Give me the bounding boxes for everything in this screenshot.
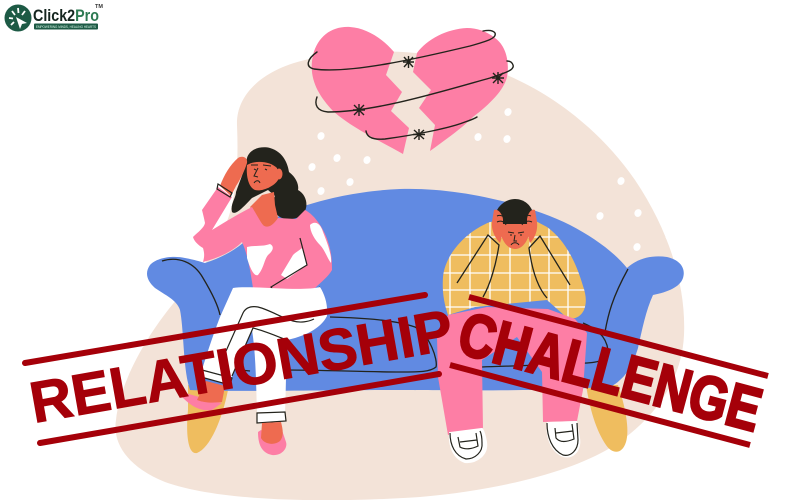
forearm and hand [220,157,247,196]
facial features [251,165,271,183]
trouser folds [222,307,314,376]
stamp bottom rule [450,365,750,445]
ear [276,168,282,180]
face [247,162,279,190]
neck and chest [250,192,278,227]
icon: broken heart [308,27,513,154]
right shoe lines [547,423,578,455]
logo tagline bar [34,24,98,30]
left hand [492,210,503,243]
sweater lines [217,184,320,308]
logo emblem [4,4,32,32]
hands on head [492,210,537,243]
man face features [508,232,524,245]
sofa [147,189,684,453]
woman [178,147,332,455]
left shoe lines [450,431,482,459]
right hand [527,210,537,243]
finger lines [497,215,532,225]
logo cursor [16,17,27,29]
sofa contour lines [162,259,628,372]
stamp top rule [469,297,768,376]
sweater white spots [247,223,331,279]
raised shoe [178,392,222,410]
man sweater [443,218,586,318]
sofa body [147,189,684,391]
barbs [353,56,504,140]
stamp top rule [25,295,425,363]
trousers [437,307,587,435]
trousers [202,287,327,412]
arm lines [457,235,570,298]
hair [496,199,533,224]
logo [4,4,103,32]
background blob [115,51,684,500]
hair [232,147,306,219]
left shoe [450,429,486,462]
stamp bottom rule [40,374,439,443]
lower foot [261,422,283,444]
man [437,199,590,462]
stamp: RELATIONSHIP [25,295,458,443]
trouser cuff [201,370,232,385]
left sofa leg [187,385,228,453]
snow dots [307,107,674,252]
stamp word: RELATIONSHIP [25,297,458,436]
raised foot [197,381,225,403]
face [499,222,531,249]
logo wordmark: Click2Pro [33,7,99,25]
sweater check pattern [442,222,585,317]
right sofa leg [586,385,627,452]
heart right half [413,28,508,151]
trademark: TM [95,4,103,10]
lower cuff [257,412,286,423]
logo rays [9,8,25,25]
sweater [193,187,332,293]
lower shoe [258,425,286,455]
right shoe [547,421,580,458]
logo tagline: EMPOWERING MINDS, HEALING HEARTS [36,25,96,29]
barbed wire strands [308,30,513,139]
heart left half [312,27,409,154]
stamp: CHALLENGE [450,297,769,445]
